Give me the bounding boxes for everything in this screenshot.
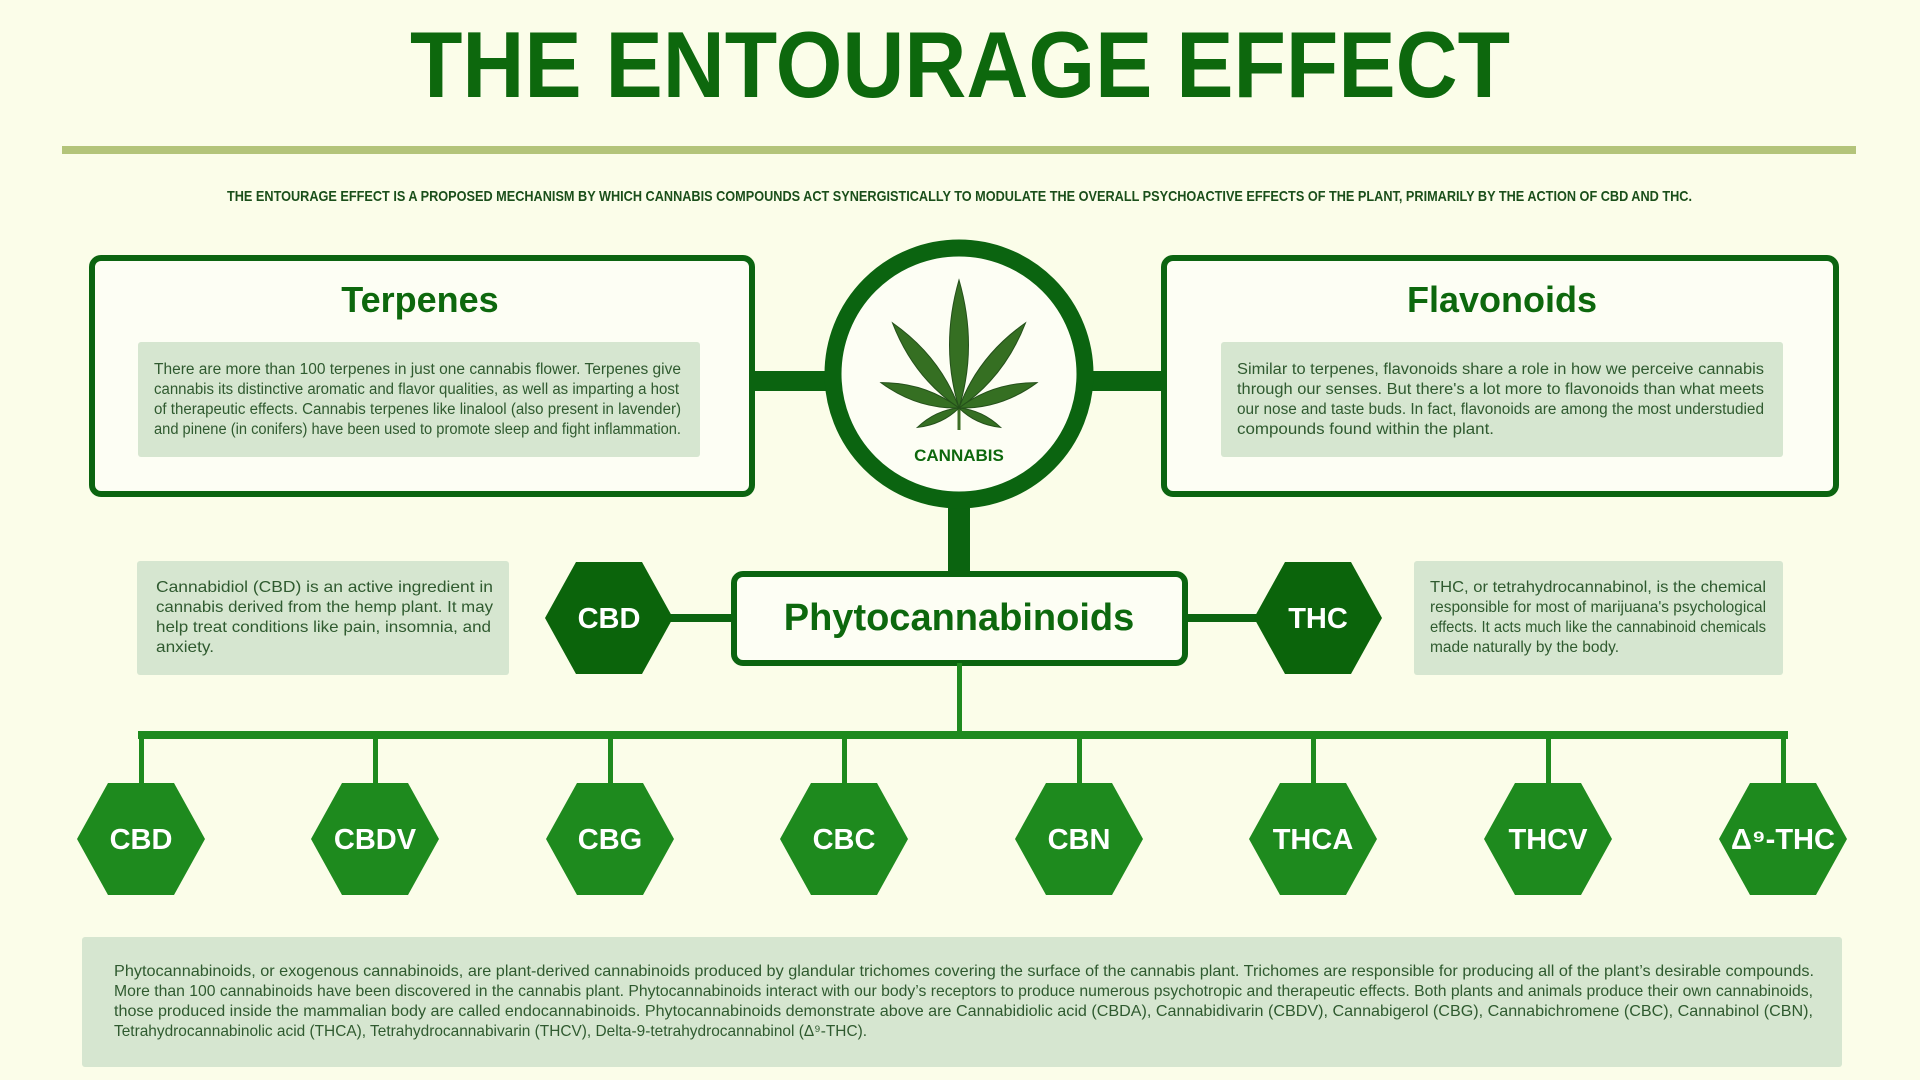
box: phytocannabinoids [734,574,1185,663]
hexagon: THC main [1254,562,1382,674]
hexagon: delta-9-THC [1719,783,1847,895]
hexagon: CBD [77,783,205,895]
label: cannabis: CANNABIS [914,446,1004,465]
hexagon: CBG: CBG [578,824,642,856]
text block: flavonoids: Similar to terpenes, flavonoids share a role in how we perceive cannabis [1237,361,1764,378]
hexagon: CBG [546,783,674,895]
text block: terpenes: of therapeutic effects. Cannabis terpenes like linalool (also present in lavender) [154,401,681,418]
text block: terpenes: There are more than 100 terpenes in just one cannabis flower. Terpenes give [154,361,681,378]
hexagon: CBD main [545,562,673,674]
connector: cannabis to flavonoids [1088,371,1164,391]
text block: THC: THC, or tetrahydrocannabinol, is the chemical [1430,579,1766,596]
text block: terpenes [138,342,700,457]
connector: phytocannabinoids to THC [1186,614,1258,622]
hexagon: CBN [1015,783,1143,895]
hexagon: THCA [1249,783,1377,895]
text block: THC: effects. It acts much like the cannabinoid chemicals [1430,619,1766,636]
heading: terpenes: Terpenes [341,279,499,320]
text block: THC: responsible for most of marijuana's psychological [1430,599,1766,616]
hexagon: THC main: THC [1288,603,1348,635]
hexagon: CBC: CBC [813,824,875,856]
text block: CBD: Cannabidiol (CBD) is an active ingredient in [156,579,493,596]
text block: flavonoids: our nose and taste buds. In fact, flavonoids are among the most understudied [1237,401,1764,418]
hexagon row: cannabinoids [77,783,1847,895]
text block: bottom description: Tetrahydrocannabinolic acid (THCA), Tetrahydrocannabivarin (THCV), Delta-9-tetrahydrocannabinol (Δ⁹-THC). [114,1023,867,1040]
icon: cannabis leaf [879,280,1039,431]
circle: cannabis [833,248,1085,500]
connector: cannabis to phytocannabinoids [948,505,970,573]
text block: bottom description: More than 100 cannabinoids have been discovered in the cannabis plant. Phytocannabinoids interact with our body’s receptors to produce numerous psychotropic and therapeutic effects. Both plants and animals produce their own cannabinoids, [114,983,1813,1000]
hexagon: THCV [1484,783,1612,895]
heading: flavonoids: Flavonoids [1407,279,1597,320]
connector: CBD to phytocannabinoids [670,614,734,622]
text block: CBD: anxiety. [156,639,214,656]
text block: terpenes: and pinene (in conifers) have been used to promote sleep and fight inflammation. [154,421,681,438]
text block: flavonoids [1221,342,1783,457]
text block: bottom description [82,937,1842,1067]
subtitle: THE ENTOURAGE EFFECT IS A PROPOSED MECHANISM BY WHICH CANNABIS COMPOUNDS ACT SYNERGISTICALLY TO MODULATE THE OVERALL PSYCHOACTIVE EFFECTS OF THE PLANT, PRIMARILY BY THE ACTION OF CBD AND THC. [227,188,1692,205]
panel: flavonoids [1164,258,1836,494]
hexagon: CBN: CBN [1048,824,1110,856]
hexagon: delta-9-THC: Δ⁹-THC [1731,824,1835,856]
hexagon: THCV: THCV [1509,824,1588,856]
text block: bottom description: Phytocannabinoids, or exogenous cannabinoids, are plant-derived cannabinoids produced by glandular trichomes covering the surface of the cannabis plant. Trichomes are responsible for producing all of the plant’s desirable compounds. [114,963,1814,980]
text block: bottom description: those produced inside the mammalian body are called endocannabinoids. Phytocannabinoids demonstrate above are Cannabidiolic acid (CBDA), Cannabidivarin (CBDV), Cannabigerol (CBG), Cannabichromene (CBC), Cannabinol (CBN), [114,1003,1813,1020]
text block: THC [1414,561,1783,675]
text block: CBD [137,561,509,675]
text block: CBD: cannabis derived from the hemp plant. It may [156,599,493,616]
hexagon: CBDV: CBDV [334,824,417,856]
text block: terpenes: cannabis its distinctive aromatic and flavor qualities, as well as imparting a host [154,381,680,398]
hexagon: CBC [780,783,908,895]
hexagon: CBDV [311,783,439,895]
box: phytocannabinoids: Phytocannabinoids [784,597,1134,639]
text block: flavonoids: compounds found within the plant. [1237,421,1494,438]
text block: flavonoids: through our senses. But there's a lot more to flavonoids than what meets [1237,381,1764,398]
text block: CBD: help treat conditions like pain, insomnia, and [156,619,491,636]
hexagon: CBD main: CBD [578,603,640,635]
title: THE ENTOURAGE EFFECT [410,12,1510,117]
tree connectors [138,663,1788,785]
panel: terpenes [92,258,752,494]
connector: terpenes to cannabis [752,371,832,391]
hexagon: THCA: THCA [1273,824,1353,856]
hexagon: CBD: CBD [110,824,172,856]
text block: THC: made naturally by the body. [1430,639,1619,656]
